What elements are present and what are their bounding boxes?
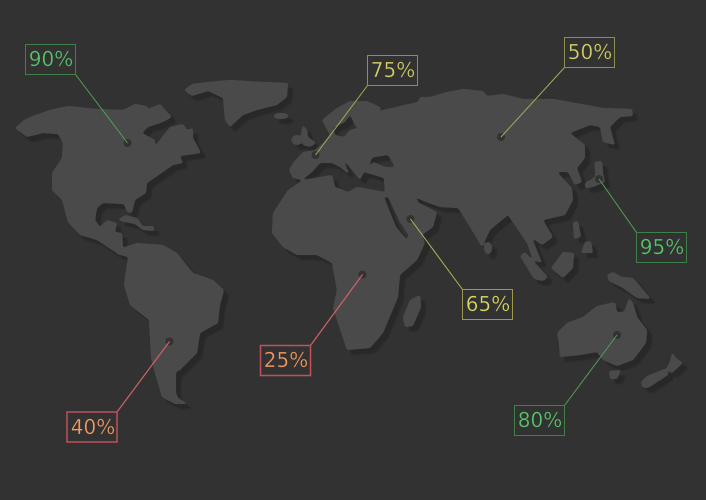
- callout: 80% Australia: 80%: [518, 408, 562, 432]
- Australia: [557, 298, 647, 366]
- Iceland: [274, 113, 288, 119]
- callout: 80% Australia: [514, 331, 621, 436]
- Ireland: [292, 135, 302, 145]
- callout: 90% North America: 90%: [29, 47, 73, 71]
- Sri Lanka: [484, 242, 492, 254]
- callout: 50% Asia: [497, 38, 614, 141]
- New Zealand: [641, 352, 683, 388]
- Philippines: [573, 221, 593, 253]
- Eurasia and Africa: [272, 89, 633, 350]
- callout: 95% Japan: 95%: [640, 235, 684, 259]
- Madagascar: [403, 295, 421, 327]
- New Guinea: [607, 272, 651, 299]
- North America: [15, 104, 201, 252]
- Borneo: [551, 252, 574, 278]
- callout: 75% Europe: 75%: [371, 58, 415, 82]
- callout: 40% South America: 40%: [71, 415, 115, 439]
- Cuba: [118, 215, 154, 231]
- callout: 90% North America: [26, 44, 132, 147]
- callout: 65% Middle East: [406, 215, 512, 320]
- callout: 25% Africa: [260, 270, 366, 376]
- Sumatra: [520, 252, 548, 281]
- callout: 95% Japan: [595, 175, 686, 262]
- South America: [113, 243, 224, 404]
- callout: 65% Middle East: 65%: [466, 292, 510, 316]
- callout: 75% Europe: [312, 56, 418, 159]
- Tasmania: [609, 370, 621, 379]
- callout: 25% Africa: 25%: [264, 348, 308, 372]
- callout: 50% Asia: 50%: [568, 40, 612, 64]
- world map: [15, 80, 683, 404]
- Japan: [585, 161, 605, 188]
- Britain: [301, 125, 316, 147]
- callout: 40% South America: [67, 338, 174, 442]
- Greenland: [184, 80, 288, 127]
